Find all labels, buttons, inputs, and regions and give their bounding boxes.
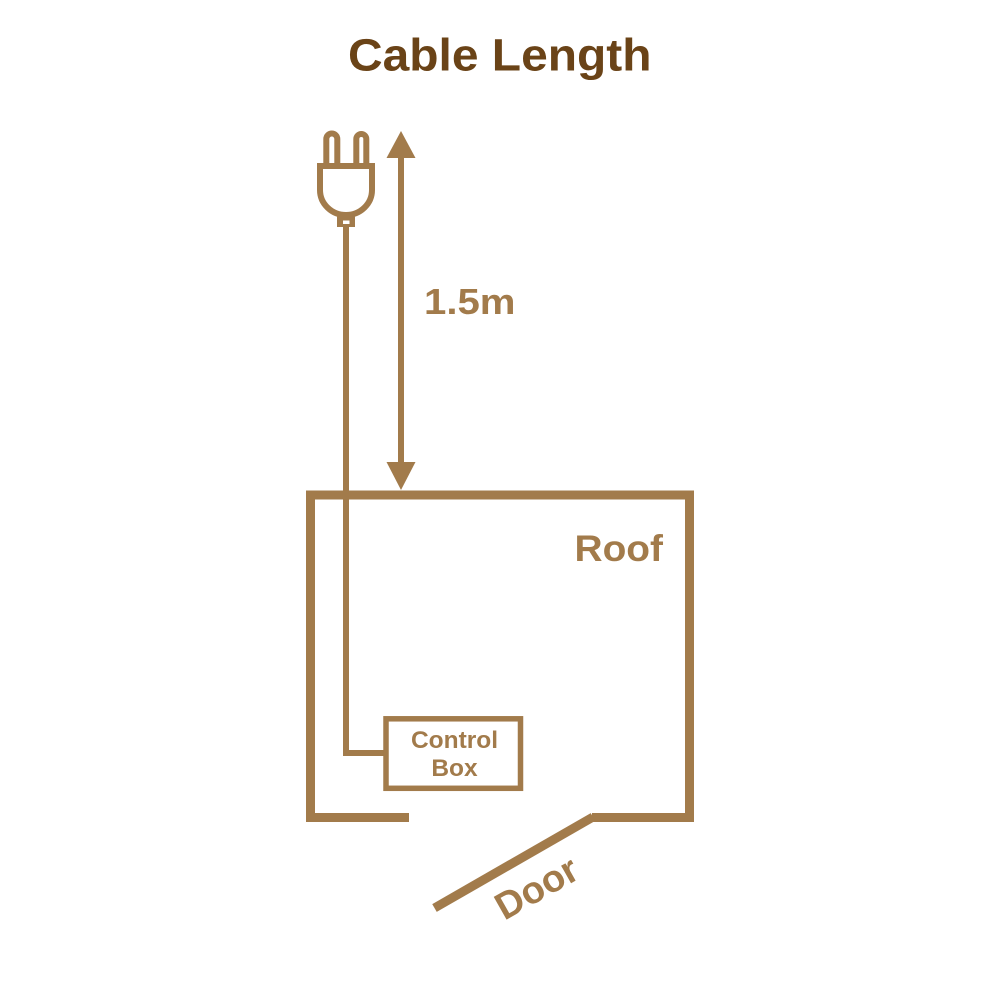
door — [434, 817, 593, 908]
control box — [386, 719, 520, 788]
icon: plug and cable — [320, 134, 385, 753]
control box: Box — [431, 755, 478, 782]
title: Cable Length — [348, 30, 652, 80]
label: 1.5m: 1.5m — [424, 281, 516, 322]
label: door: Door — [488, 848, 586, 929]
label: roof: Roof — [574, 528, 664, 569]
control box: Control — [411, 727, 498, 754]
roof outline — [310, 495, 690, 818]
arrow: 1.5m dimension — [386, 131, 416, 490]
